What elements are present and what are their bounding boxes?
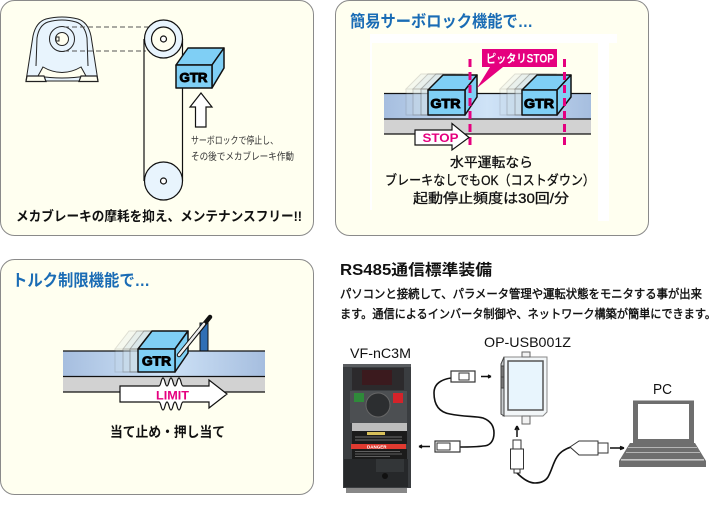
- heading: 簡易サーボロック機能で…: [350, 11, 533, 31]
- heading: トルク制限機能で…: [12, 270, 150, 290]
- white frame: [370, 34, 617, 221]
- note: servo lock: その後でメカブレーキ作動: [191, 150, 294, 163]
- ghost boxes 2: [500, 74, 564, 115]
- caption: メカブレーキの摩耗を抑え、メンテナンスフリー!!: [16, 208, 302, 224]
- paragraph: パソコンと接続して、パラメータ管理や運転状態をモニタする事が出来: [340, 286, 702, 301]
- conveyor: [63, 351, 265, 392]
- icon: laptop: [619, 400, 706, 467]
- arrow: LIMIT: LIMIT: [156, 390, 189, 402]
- arrow: to PC: [610, 446, 624, 450]
- arrow: up to adapter: [515, 426, 519, 437]
- GTR box: [138, 331, 188, 372]
- label: VF-nC3M: VF-nC3M: [350, 345, 411, 361]
- pink stop lines: [470, 59, 564, 150]
- icon: adapter: [501, 352, 547, 424]
- GTR box 1: [428, 75, 477, 115]
- note: servo lock: [191, 134, 294, 163]
- icon: cable 1: [434, 371, 494, 452]
- icon: USB cable: [510, 440, 608, 483]
- arrow: STOP: STOP: [422, 133, 459, 145]
- icon: inverter: [343, 364, 411, 493]
- arrow: up: [190, 93, 212, 127]
- paragraph: [340, 286, 716, 321]
- section: RS485: [340, 260, 716, 493]
- callout: ピッタリSTOP: [486, 52, 554, 66]
- icon: motor: [26, 17, 98, 82]
- icon: belt and pulleys: [144, 20, 182, 200]
- conveyor: [384, 93, 591, 134]
- arrow: STOP: [415, 124, 469, 150]
- arrow: LIMIT: [120, 378, 227, 410]
- callout: [477, 49, 557, 88]
- ghost boxes 1: [406, 74, 470, 115]
- label: PC: PC: [653, 381, 672, 398]
- icon: wall: [200, 323, 208, 351]
- panel: mechanical brake: [0, 0, 314, 236]
- text block: [385, 155, 595, 206]
- label: OP-USB001Z: OP-USB001Z: [484, 334, 571, 350]
- heading: RS485通信標準装備: [340, 260, 493, 279]
- icon: GTR box: GTR: [180, 71, 208, 85]
- icon: GTR box: [176, 48, 224, 88]
- text block: 起動停止頻度は30回/分: [413, 191, 570, 206]
- note: servo lock: サーボロックで停止し、: [191, 134, 278, 147]
- GTR box 2: GTR: [524, 97, 554, 111]
- ghost boxes: [115, 331, 178, 372]
- icon: inverter: DANGER: [367, 444, 387, 450]
- GTR box 1: GTR: [430, 97, 460, 111]
- GTR box: GTR: [142, 354, 171, 368]
- caption: 当て止め・押し当て: [110, 424, 225, 440]
- text block: 水平運転なら: [450, 155, 533, 170]
- arrow: to inverter: [419, 445, 430, 448]
- text block: ブレーキなしでもOK（コストダウン）: [385, 172, 595, 188]
- icon: push rod: [179, 317, 210, 355]
- arrow: to adapter: [481, 375, 491, 378]
- panel: torque limit: [0, 260, 314, 494]
- GTR box 2: [522, 75, 571, 115]
- dashed lines: [64, 27, 162, 51]
- panel: simple servo lock: [336, 0, 648, 236]
